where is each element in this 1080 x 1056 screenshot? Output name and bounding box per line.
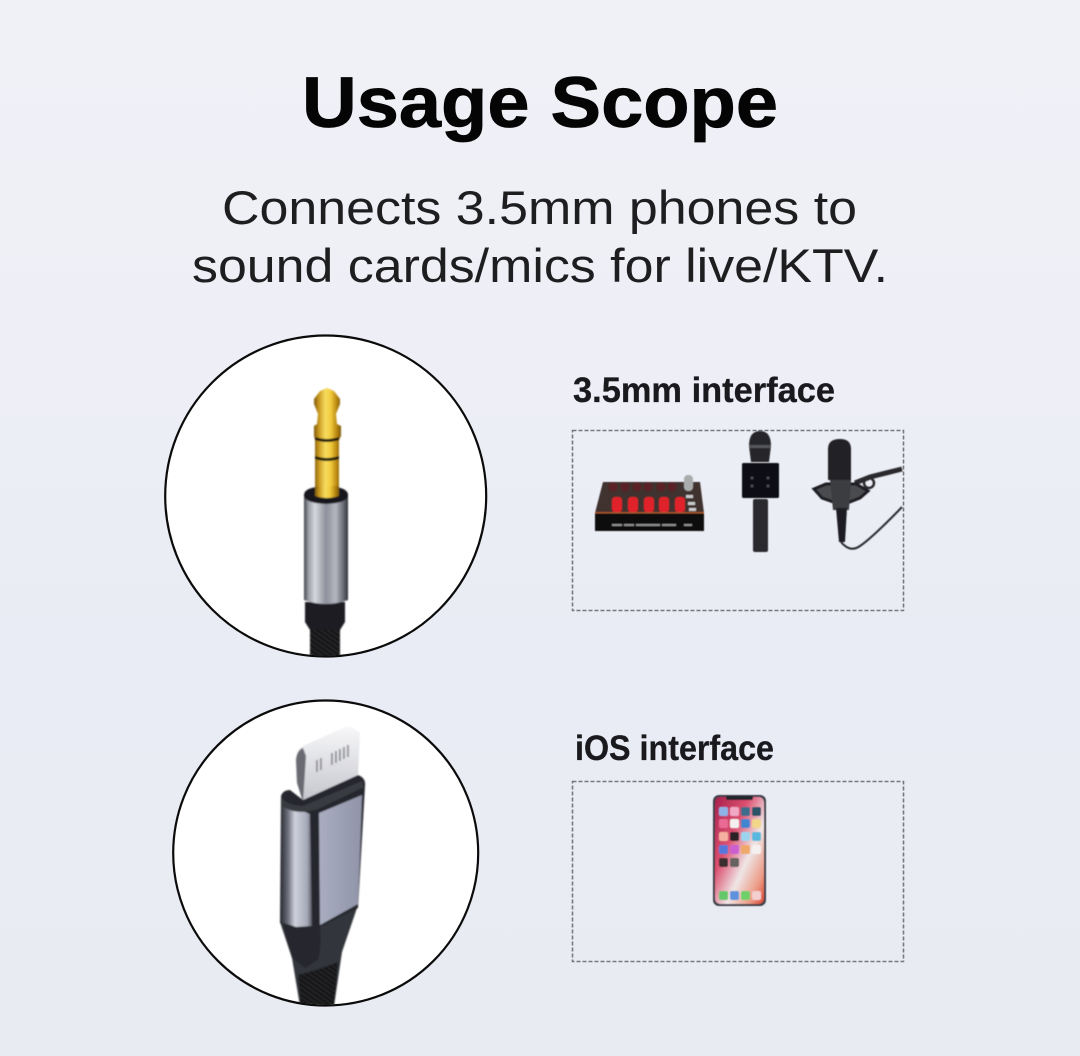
panel: 3.5mm devices box bbox=[572, 430, 904, 610]
icon: Lightning plug bbox=[280, 727, 365, 1006]
icon: 3.5mm jack plug bbox=[304, 388, 348, 660]
subtitle text bbox=[192, 181, 888, 292]
panel: 3.5mm jack circle bbox=[165, 336, 486, 660]
icon: handheld karaoke microphone bbox=[742, 431, 779, 552]
panel: iOS connector circle bbox=[173, 700, 478, 1006]
panel: iOS devices box bbox=[572, 782, 904, 962]
icon: sound card mixer bbox=[595, 475, 704, 531]
title: Usage Scope bbox=[302, 64, 778, 143]
heading: 3.5mm interface: 3.5mm interface bbox=[573, 371, 835, 410]
icon: studio condenser microphone bbox=[814, 439, 902, 549]
subtitle text: sound cards/mics for live/KTV. bbox=[192, 239, 888, 292]
subtitle text: Connects 3.5mm phones to bbox=[222, 181, 857, 234]
heading: iOS interface: iOS interface bbox=[575, 729, 774, 768]
icon: smartphone bbox=[713, 795, 766, 906]
